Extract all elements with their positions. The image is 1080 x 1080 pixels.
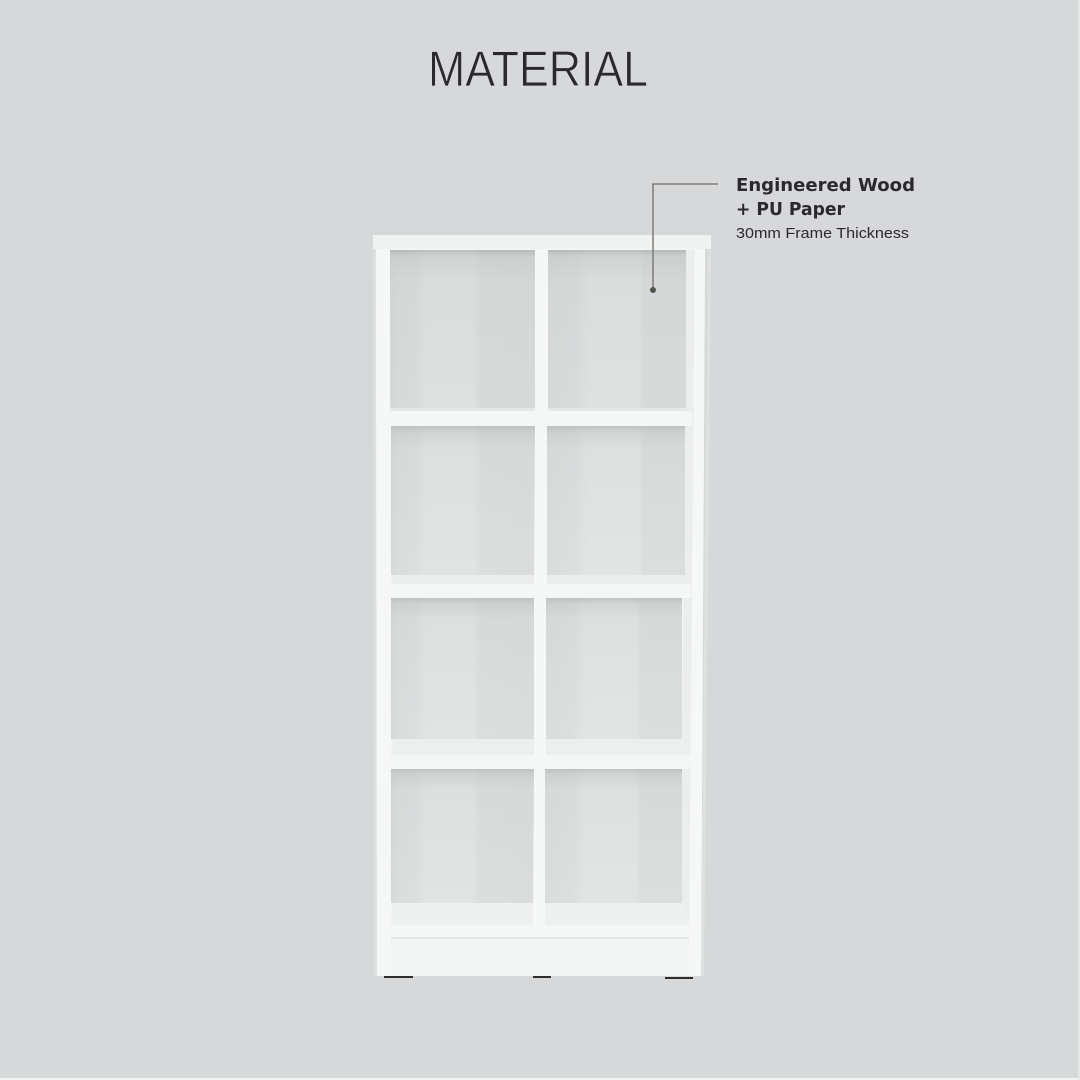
callout text: [736, 175, 915, 242]
right side wall: [681, 250, 695, 925]
callout text: + PU Paper: [736, 199, 845, 220]
shelf front 3: [391, 755, 690, 769]
shelf front 4: [391, 925, 689, 937]
title: MATERIAL: [428, 41, 648, 97]
callout leader line: [650, 184, 718, 293]
row 4 cells: [390, 769, 689, 925]
center divider: [533, 250, 548, 925]
shelf front 2: [391, 584, 691, 598]
bookshelf: [373, 235, 711, 979]
outer shadow strips: [373, 249, 711, 976]
feet: [384, 976, 693, 979]
callout text: Engineered Wood: [736, 175, 915, 196]
top board: [373, 235, 711, 249]
shelf front 1: [390, 411, 692, 426]
callout text: 30mm Frame Thickness: [736, 225, 909, 242]
row 3 cells: [391, 598, 690, 755]
plinth: [391, 937, 689, 939]
row 2 cells: [391, 426, 691, 584]
right post: [689, 250, 705, 976]
row 1 cells: [390, 250, 691, 411]
left post: [376, 249, 391, 976]
bookshelf body: [376, 249, 705, 976]
